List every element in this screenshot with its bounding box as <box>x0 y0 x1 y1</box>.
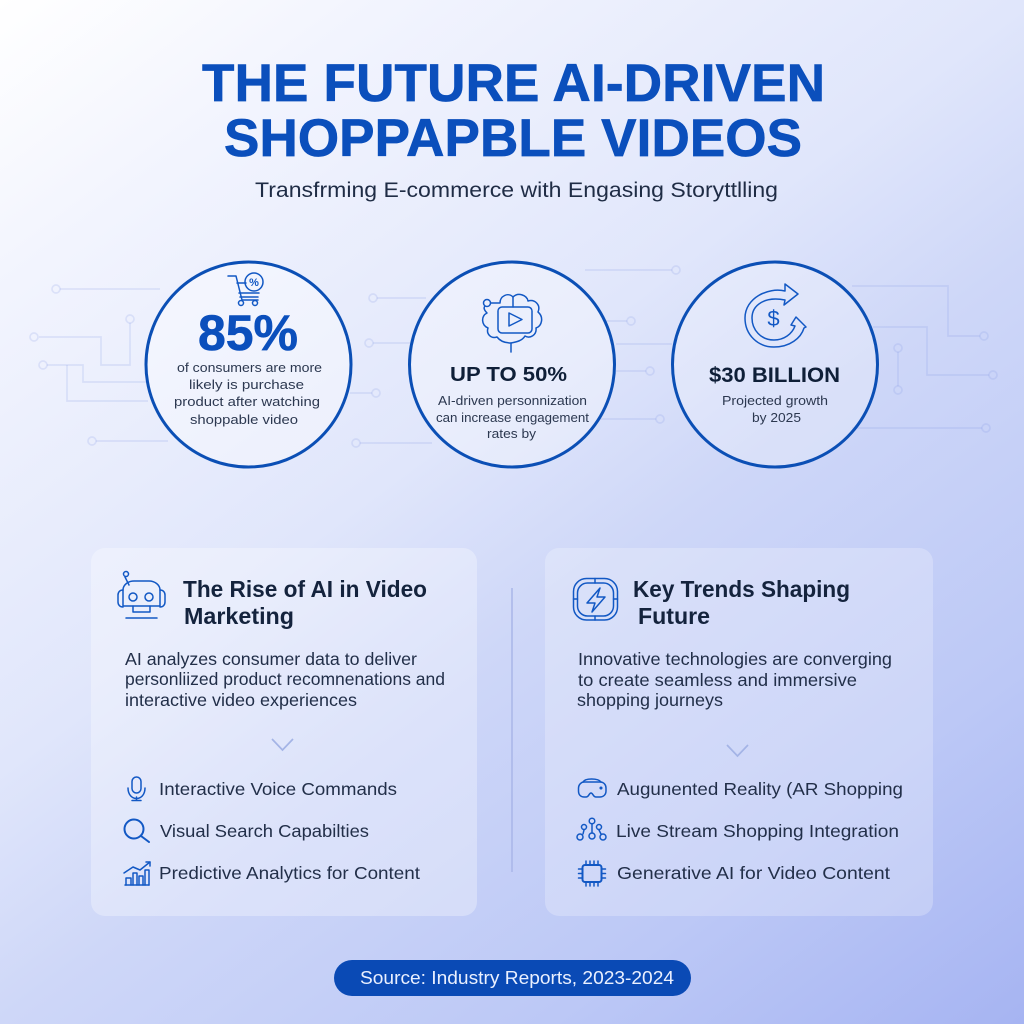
panel: the rise of AI in video marketing <box>91 548 477 916</box>
title: SHOPPAPBLE VIDEOS <box>224 109 802 168</box>
stat description: shoppable video <box>190 412 298 427</box>
background circuit lines <box>30 266 997 447</box>
panel description: shopping journeys <box>577 690 723 710</box>
panel description: AI analyzes consumer data to deliver <box>125 649 417 669</box>
list item: Generative AI for Video Content <box>617 863 890 883</box>
icon: chevron down <box>272 739 293 750</box>
list item: Interactive Voice Commands <box>159 779 397 799</box>
stat description: Projected growth <box>722 393 828 408</box>
stat description: product after watching <box>174 394 320 409</box>
panel heading: Marketing <box>184 603 294 629</box>
panel description: Innovative technologies are converging <box>578 649 892 669</box>
panel heading: The Rise of AI in Video <box>183 576 427 602</box>
icon: circular dollar arrows: $ <box>767 306 780 331</box>
stat circle: $30 billion <box>672 262 878 467</box>
icon: circular dollar arrows <box>745 284 806 347</box>
icon: network nodes <box>577 818 606 840</box>
icon: bar chart with trend <box>124 862 150 885</box>
stat description <box>722 393 828 425</box>
panel description: personliized product recomnenations and <box>125 669 445 689</box>
stat description: by 2025 <box>752 410 801 425</box>
stat value: $30 BILLION <box>709 364 840 387</box>
stat description <box>436 393 589 441</box>
icon: VR headset <box>578 779 606 797</box>
panel description <box>577 649 892 710</box>
icon: brain with video play <box>483 294 542 352</box>
stat description: can increase engagement <box>436 410 589 425</box>
icon: magnifier <box>124 820 149 842</box>
icon: microphone <box>128 777 145 800</box>
icon: microchip <box>578 861 606 886</box>
source pill <box>334 960 691 996</box>
panel description: to create seamless and immersive <box>578 670 857 690</box>
panel heading <box>183 576 427 629</box>
icon: robot <box>118 572 165 618</box>
panel description: interactive video experiences <box>125 690 357 710</box>
icon: lightning in rounded square <box>574 578 618 620</box>
icon: shopping cart with percent tag: % <box>249 277 259 289</box>
stat description: of consumers are more <box>177 360 322 375</box>
stat description <box>174 360 322 427</box>
title <box>202 54 825 168</box>
list item: Augunented Reality (AR Shopping <box>617 779 903 799</box>
stat value: 85% <box>198 305 298 361</box>
panel description <box>125 649 445 710</box>
subtitle: Transfrming E-commerce with Engasing Storyttlling <box>255 178 778 202</box>
list item: Predictive Analytics for Content <box>159 863 420 883</box>
panel heading: Key Trends Shaping <box>633 576 850 602</box>
panel heading: Future <box>638 603 710 629</box>
panel heading <box>633 576 850 629</box>
stat circle: up to 50% <box>410 262 614 467</box>
icon: chevron down <box>727 745 748 756</box>
stat circle: 85% <box>146 262 351 467</box>
center divider <box>511 588 513 872</box>
stat description: AI-driven personnization <box>438 393 587 408</box>
panel: key trends shaping future <box>545 548 933 916</box>
stat description: rates by <box>487 426 536 441</box>
stat description: likely is purchase <box>189 377 304 392</box>
source pill: Source: Industry Reports, 2023-2024 <box>360 968 674 988</box>
title: THE FUTURE AI-DRIVEN <box>202 54 825 113</box>
list item: Live Stream Shopping Integration <box>616 821 899 841</box>
stat value: UP TO 50% <box>450 364 567 386</box>
icon: shopping cart with percent tag <box>228 273 263 306</box>
list item: Visual Search Capabilties <box>160 821 369 841</box>
